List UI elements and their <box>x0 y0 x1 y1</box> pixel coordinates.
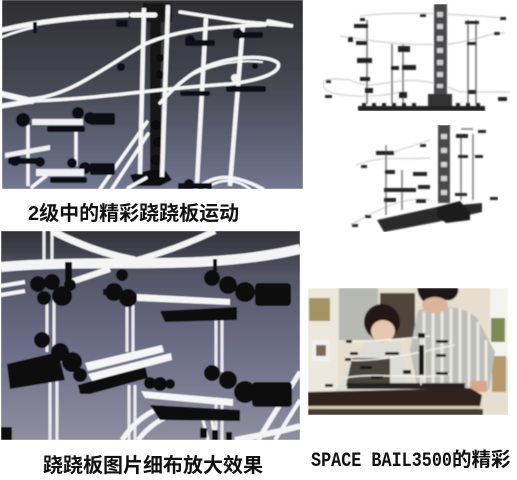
poles <box>28 5 243 186</box>
caption: SPACE BAIL3500: SPACE BAIL3500的精彩 <box>311 443 511 473</box>
miniature run <box>347 383 465 389</box>
table <box>308 388 482 407</box>
man <box>410 307 495 390</box>
seesaw planks <box>85 294 233 406</box>
seesaw clamps and motors <box>1 259 292 440</box>
product photo: top model <box>323 4 510 111</box>
panel: seesaw enlarged photo <box>1 231 300 440</box>
tower <box>143 3 172 175</box>
caption: seesaw enlarged: 跷跷板图片细布放大效果 <box>43 454 263 477</box>
family photo: couple with marble run <box>308 288 508 415</box>
caption: level 2 seesaw: 2级中的精彩跷跷板运动 <box>28 202 239 225</box>
seesaw parts <box>8 20 266 189</box>
product photo: angled model <box>350 125 498 232</box>
white tracks <box>2 12 293 189</box>
panel: level 2 seesaw photo <box>2 0 303 189</box>
poles <box>44 231 222 440</box>
woman <box>364 304 400 340</box>
